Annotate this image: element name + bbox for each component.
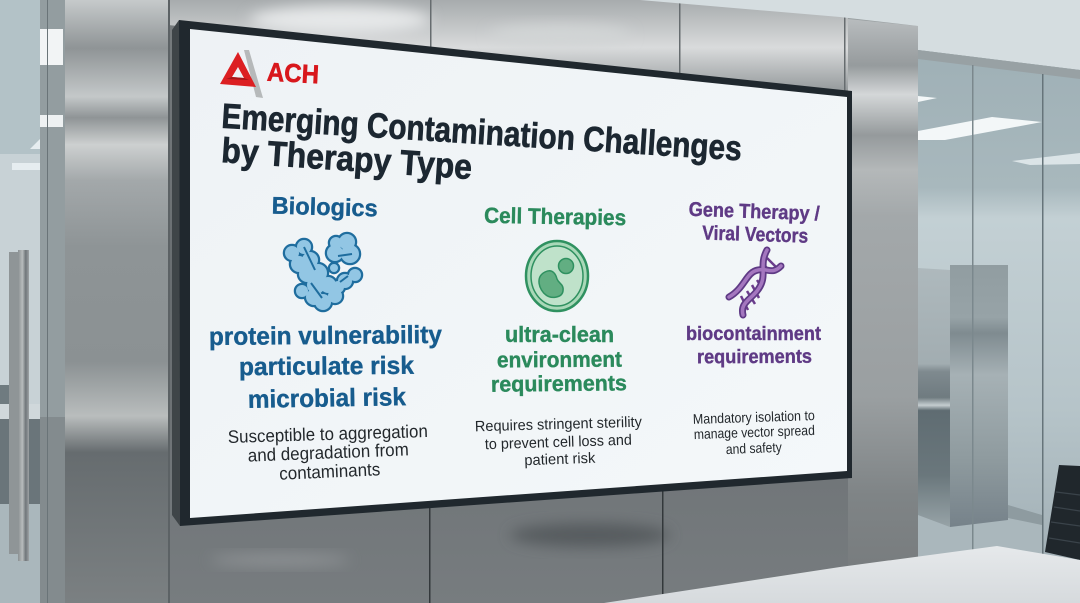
heading: gene therapy / viral vectors: Viral Vectors	[702, 222, 809, 248]
text: cell therapies requirements	[491, 322, 627, 397]
display bezel	[179, 20, 852, 526]
text: biologics risks: protein vulnerability	[209, 321, 442, 351]
logo mark	[220, 50, 263, 98]
display frame	[172, 20, 180, 526]
background: office room behind glass, left	[0, 0, 40, 603]
panel: gene therapy / viral vectors	[686, 199, 821, 457]
text: cell therapies description	[475, 414, 643, 469]
text: biologics description: and degradation from	[247, 439, 409, 466]
heading: biologics: Biologics	[271, 193, 378, 222]
text: biologics description	[228, 421, 428, 484]
text: cell therapies requirements: environment	[497, 347, 623, 372]
text: gene therapy description	[693, 407, 815, 457]
background: steel column right of the display	[848, 19, 918, 600]
background: door frame	[40, 0, 65, 603]
background: ceiling	[640, 0, 1080, 70]
text: biologics risks: microbial risk	[248, 383, 406, 414]
office chair	[1045, 465, 1080, 560]
icon: cell	[526, 241, 588, 311]
conference table	[604, 546, 1080, 603]
text: gene therapy requirements: biocontainment	[686, 323, 821, 345]
text: gene therapy requirements: requirements	[697, 346, 812, 368]
text: biologics description: contaminants	[279, 459, 381, 484]
text: gene therapy requirements	[686, 323, 821, 368]
text: biologics risks	[209, 321, 442, 414]
icon: dna helix	[729, 250, 781, 315]
icon: protein molecule	[285, 234, 361, 310]
background: stainless steel wall behind the display	[168, 0, 850, 603]
heading: gene therapy / viral vectors: Gene Therapy /	[688, 199, 820, 225]
text: cell therapies description: patient risk	[524, 450, 596, 469]
text: cell therapies requirements: ultra-clean	[505, 322, 614, 347]
title: by Therapy Type	[220, 131, 473, 187]
text: biologics risks: particulate risk	[239, 352, 414, 381]
logo: ACH	[220, 50, 320, 98]
text: cell therapies description: to prevent cell loss and	[485, 432, 632, 453]
title: Emerging Contamination Challenges	[221, 97, 743, 168]
display screen	[190, 29, 847, 518]
text: biologics description: Susceptible to aggregation	[228, 421, 428, 447]
text: gene therapy description: and safety	[726, 439, 782, 457]
text: gene therapy description: manage vector spread	[694, 422, 815, 442]
text: gene therapy description: Mandatory isolation to	[693, 407, 815, 427]
panel: biologics	[209, 193, 442, 484]
text: cell therapies description: Requires stringent sterility	[475, 414, 643, 435]
panel: cell therapies	[475, 203, 643, 469]
background: glass partition	[918, 50, 1080, 560]
heading: gene therapy / viral vectors	[688, 199, 820, 248]
door handle	[9, 250, 29, 561]
background: stainless steel column	[65, 0, 168, 603]
text: cell therapies requirements: requirements	[491, 370, 627, 397]
logo wordmark: ACH	[266, 57, 320, 89]
heading: cell therapies: Cell Therapies	[484, 203, 626, 230]
